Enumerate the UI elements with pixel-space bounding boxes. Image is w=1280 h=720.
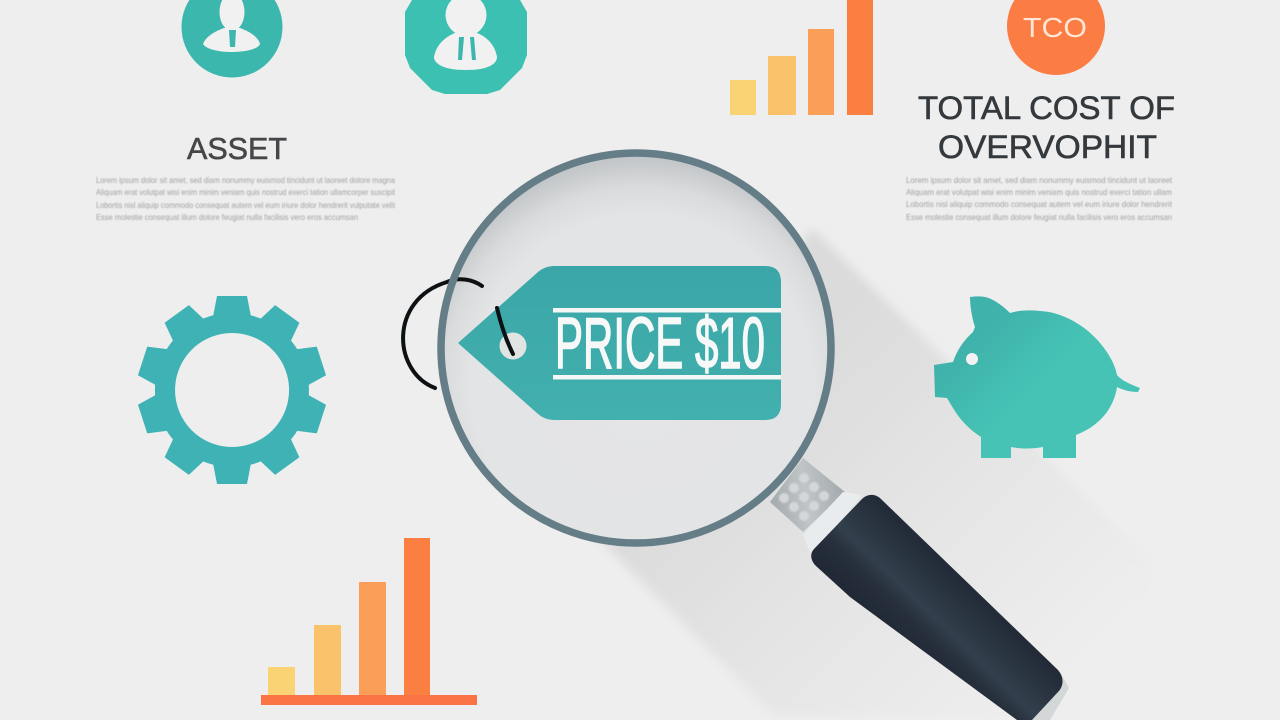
tag string	[403, 279, 513, 388]
magnifying glass	[403, 153, 1069, 720]
magnifier handle	[770, 458, 1069, 720]
text block: total cost description: Lorem ipsum dolor sit amet, sed diam nonummy euismod tincidunt ut laoreet	[906, 175, 1173, 185]
bar chart: bottom	[261, 538, 477, 705]
icon: gear	[136, 296, 328, 484]
icon: tco badge	[1007, 0, 1105, 75]
text block: total cost description	[906, 175, 1173, 222]
text block: total cost description: Esse molestie consequat illum dolore feugiat nulla facilisis vero eros accumsan	[906, 212, 1172, 222]
lens ring	[441, 153, 831, 543]
price tag	[458, 266, 781, 420]
heading: total cost: OVERVOPHIT	[938, 129, 1157, 165]
text block: asset description: Lobortis nisl aliquip commodo consequat autem vel eum iriure dolor hendrerit vulputate velit	[96, 200, 396, 210]
text block: total cost description: Lobortis nisl aliquip commodo consequat autem vel eum iriure dolor hendrerit	[906, 199, 1173, 209]
magnifier cast shadow	[600, 228, 1150, 716]
heading: asset: ASSET	[187, 131, 287, 166]
text block: asset description: Esse molestie consequat illum dolore feugiat nulla facilisis vero eros accumsan	[96, 212, 358, 222]
icon: tco badge: TCO	[1023, 12, 1087, 43]
heading: total cost: TOTAL COST OF	[918, 90, 1175, 126]
bar chart: top	[730, 0, 873, 115]
icon: person in octagonal badge	[405, 0, 527, 94]
icon: piggy bank	[934, 296, 1140, 458]
lens	[441, 153, 831, 543]
text block: asset description: Lorem ipsum dolor sit amet, sed diam nonummy euismod tincidunt ut laoreet dolore magna	[96, 175, 395, 185]
heading: total cost	[918, 90, 1175, 165]
text block: total cost description: Aliquam erat volutpat wisi enim minim veniam quis nostrud exerci tation ullam	[906, 187, 1172, 197]
icon: person in round badge	[182, 0, 282, 78]
price tag: PRICE $10	[555, 304, 765, 384]
text block: asset description: Aliquam erat volutpat wisi enim minim veniam quis nostrud exerci tation ullamcorper suscipit	[96, 187, 396, 197]
text block: asset description	[96, 175, 396, 222]
